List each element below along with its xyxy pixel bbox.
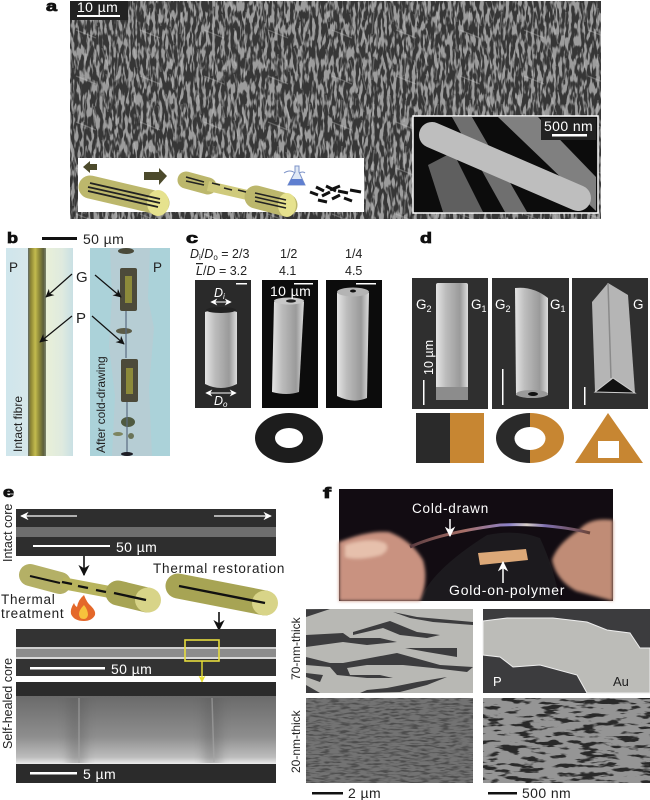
micrograph background of rods xyxy=(70,1,601,219)
ratio labels: 4.5 xyxy=(345,264,362,278)
rod micrograph 2: 10 µm xyxy=(270,283,311,299)
ratio labels: 1/4 xyxy=(345,247,362,261)
rotated label intact core: Intact core xyxy=(1,504,15,562)
image: after cold-drawing xyxy=(90,248,170,456)
schematic: thermally restored fibre xyxy=(178,586,278,616)
text: thermal treatment: treatment xyxy=(1,606,64,621)
icon: flask xyxy=(284,166,305,185)
micrograph: 20 nm film low magnification xyxy=(306,698,473,783)
rod micrograph 2 xyxy=(262,280,318,408)
micrograph: 20 nm film high magnification xyxy=(483,698,650,783)
arrow: gold-on-polymer xyxy=(502,562,504,583)
panel d: composite microrods xyxy=(412,230,648,463)
photograph: hands holding fibre: Cold-drawn xyxy=(412,501,489,516)
photograph: hands holding fibre: Gold-on-polymer xyxy=(449,582,565,598)
scale bar 2 µm xyxy=(312,785,381,800)
micrograph: round rod: G xyxy=(495,297,506,312)
left arrow xyxy=(83,161,97,173)
dimension Do: D xyxy=(214,394,223,408)
panel c: hollow microrods xyxy=(186,230,382,463)
square cross-section xyxy=(416,413,484,463)
micrograph: 70 nm film high magnification: Au xyxy=(613,674,629,689)
rotated label 70-nm-thick: 70-nm-thick xyxy=(289,616,303,680)
rotated label 20-nm-thick: 20-nm-thick xyxy=(289,709,303,773)
scale bar 500 nm xyxy=(488,785,571,800)
labels G and P with arrows: P xyxy=(76,310,86,327)
ratio labels: i xyxy=(199,253,201,262)
panel e: self-healing xyxy=(1,484,285,783)
ratio labels: / xyxy=(201,247,205,261)
micrograph: 70 nm film high magnification xyxy=(483,609,650,693)
schematic: fibre under thermal treatment xyxy=(30,575,161,612)
micrograph: round rod xyxy=(492,278,569,409)
ratio labels: 1/2 xyxy=(280,247,297,261)
rotated label self-healed core: Self-healed core xyxy=(1,658,15,749)
panel b: optical images of fibre xyxy=(6,230,170,456)
necked fibre with fragments xyxy=(186,177,296,217)
rotated caption: After cold-drawing xyxy=(94,356,108,453)
micrograph: 70 nm film low magnification xyxy=(306,609,473,693)
micrograph: self-healed core high magnification xyxy=(16,682,276,783)
ratio labels: 4.1 xyxy=(279,264,296,278)
inset: single rod micrograph xyxy=(413,116,598,213)
label e: e xyxy=(3,484,14,501)
micrograph: round rod: 1 xyxy=(561,304,566,314)
icon: flame xyxy=(71,595,95,621)
arrow xyxy=(218,612,220,630)
micrograph: triangular rod xyxy=(572,278,648,409)
rod micrograph 1 xyxy=(195,280,251,409)
scale bar 50 µm: 50 µm xyxy=(83,231,124,247)
labels G and P with arrows: G xyxy=(76,269,88,286)
rod micrograph 3 xyxy=(326,280,382,408)
dimension Di: i xyxy=(223,292,225,301)
scale bar 50 µm xyxy=(42,231,124,247)
intact fibre xyxy=(88,183,169,216)
inset: cold-drawing schematic xyxy=(78,158,364,217)
panel a: nanorods micrograph xyxy=(46,0,601,219)
rotated caption: Intact fibre xyxy=(11,396,25,452)
micrograph: round rod: 2 xyxy=(506,304,511,314)
ratio labels: o xyxy=(213,253,218,262)
right arrow xyxy=(144,168,167,185)
panel f: gold on polymer xyxy=(289,485,650,800)
triangle cross-section xyxy=(575,413,643,463)
yellow arrow xyxy=(201,661,203,682)
fragments xyxy=(310,186,361,202)
gold strip xyxy=(478,549,528,565)
label d: d xyxy=(420,230,432,247)
micrograph: self-healed core low magnification xyxy=(16,629,276,682)
dimension Do xyxy=(206,393,236,409)
dimension Do: o xyxy=(223,400,228,409)
micrograph: square rod: 10 µm xyxy=(422,340,436,375)
ring cross-section xyxy=(255,413,323,463)
micrograph: square rod: G xyxy=(416,297,427,312)
micrograph: square rod: G xyxy=(471,297,482,312)
label P: P xyxy=(9,260,18,275)
scale bar 10 µm xyxy=(70,0,128,20)
micrograph: square rod: 2 xyxy=(427,304,432,314)
dimension Di: D xyxy=(214,286,223,300)
photograph: hands holding fibre xyxy=(339,489,613,601)
micrograph: round rod: G xyxy=(550,297,561,312)
label f: f xyxy=(323,485,333,502)
dimension Di xyxy=(211,286,231,302)
arrow xyxy=(83,556,85,575)
micrograph: self-healed core low magnification: 50 µm xyxy=(111,661,152,677)
arrow: cold-drawn xyxy=(449,519,451,536)
text: thermal restoration: Thermal restoration xyxy=(153,561,285,576)
micrograph: square rod xyxy=(412,278,488,409)
label b: b xyxy=(7,230,18,247)
scale bar 500 nm xyxy=(541,118,596,140)
micrograph: triangular rod: G xyxy=(633,297,644,312)
micrograph: 70 nm film high magnification: P xyxy=(493,674,502,689)
micrograph: intact core: 50 µm xyxy=(116,539,157,555)
scale bar 500 nm: 500 nm xyxy=(544,118,593,134)
label P: P xyxy=(153,260,162,275)
micrograph: self-healed core high magnification: 5 µm xyxy=(83,766,116,782)
ratio labels: L/D = 3.2 xyxy=(196,264,247,278)
yellow selection box xyxy=(185,640,219,661)
ratio labels: D xyxy=(190,247,199,261)
micrograph: square rod: 1 xyxy=(482,304,487,314)
ratio labels: = 2/3 xyxy=(218,247,249,261)
image: intact fibre xyxy=(6,248,73,456)
ratio labels: D xyxy=(204,247,213,261)
ring cross-section two-material xyxy=(496,413,564,463)
label c: c xyxy=(186,230,198,247)
text: thermal treatment: Thermal xyxy=(1,592,55,607)
labels G and P with arrows xyxy=(40,269,124,344)
micrograph: intact core xyxy=(16,509,276,556)
ratio labels xyxy=(190,247,362,278)
